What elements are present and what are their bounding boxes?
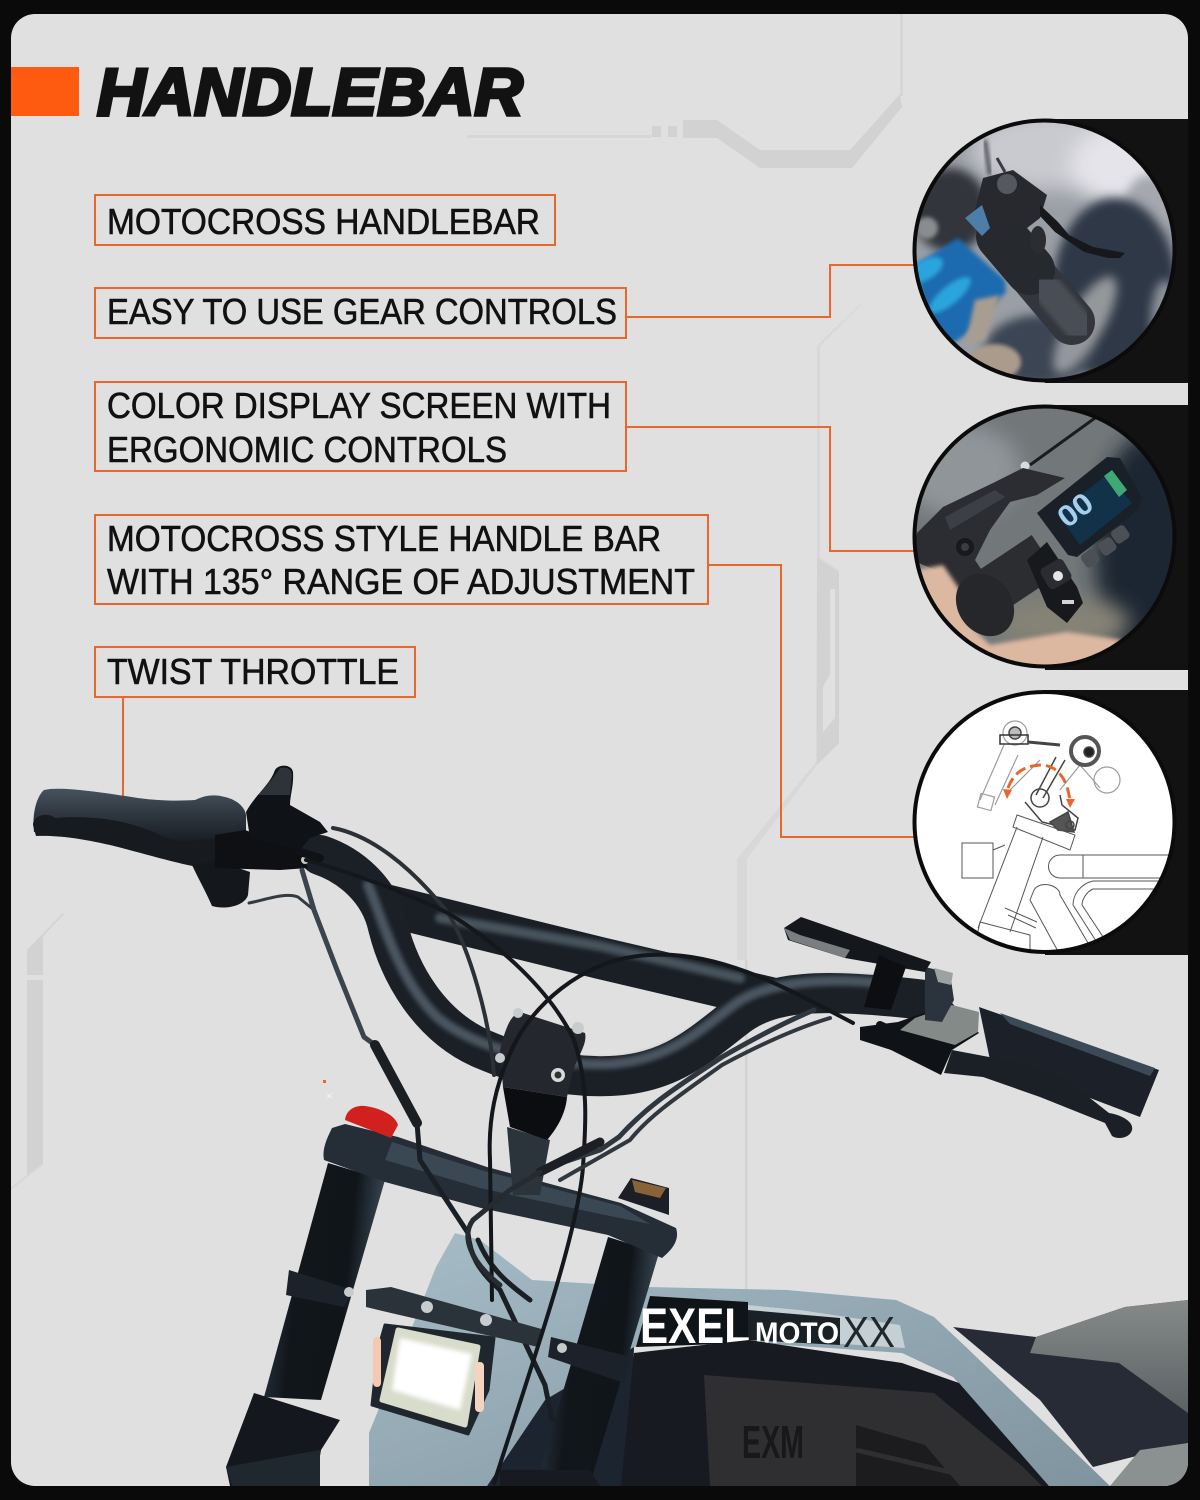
headlight (372, 1325, 494, 1434)
diagram: handlebar adjustment (910, 688, 1183, 960)
callout: adjustment range: MOTOCROSS STYLE HANDLE BAR (107, 518, 661, 559)
left grip and controls (33, 766, 328, 908)
frame and tank (369, 1233, 1110, 1486)
callout: gear controls: EASY TO USE GEAR CONTROLS (107, 291, 617, 332)
photo: motorbike front with handlebar (33, 766, 1188, 1486)
top cap right (618, 1178, 669, 1215)
display unit (784, 917, 931, 1010)
red cap (345, 1106, 398, 1138)
cables (249, 828, 895, 1483)
callout: color display (95, 382, 626, 471)
frame and tank: EXEL (640, 1298, 750, 1354)
headlight bracket (366, 1287, 545, 1347)
frame bag (621, 1340, 1049, 1486)
right grip and controls (860, 967, 1159, 1138)
small marks (323, 1080, 332, 1098)
title: HANDLEBAR (97, 55, 523, 130)
left fork (226, 1163, 385, 1486)
triple clamp (323, 1124, 677, 1258)
right fork (500, 1237, 659, 1486)
callout: motocross handlebar: MOTOCROSS HANDLEBAR (107, 201, 540, 242)
cable bundle behind stem (468, 1233, 552, 1420)
callout: adjustment range: WITH 135° RANGE OF ADJUSTMENT (107, 561, 695, 602)
callout: color display: COLOR DISPLAY SCREEN WITH (107, 385, 611, 426)
connector lines (123, 265, 915, 837)
accent block (11, 67, 79, 116)
handlebar tubes (320, 855, 925, 1076)
photo: colour display: 00 (1051, 487, 1100, 535)
stem clamp (495, 1008, 585, 1140)
small marks: × (326, 1089, 333, 1103)
photo: colour display (912, 404, 1172, 668)
seat (953, 1300, 1188, 1486)
photo: gear shifter and grip (903, 110, 1180, 385)
frame and tank: MOTO (755, 1317, 839, 1350)
dark bands behind photos (1045, 119, 1188, 955)
frame and tank: XX (843, 1308, 895, 1357)
stem steerer (507, 1127, 550, 1195)
callout: adjustment range (95, 515, 708, 604)
callout: color display: ERGONOMIC CONTROLS (107, 429, 507, 470)
frame bag: EXM (742, 1416, 804, 1468)
callout: twist throttle: TWIST THROTTLE (107, 651, 399, 692)
